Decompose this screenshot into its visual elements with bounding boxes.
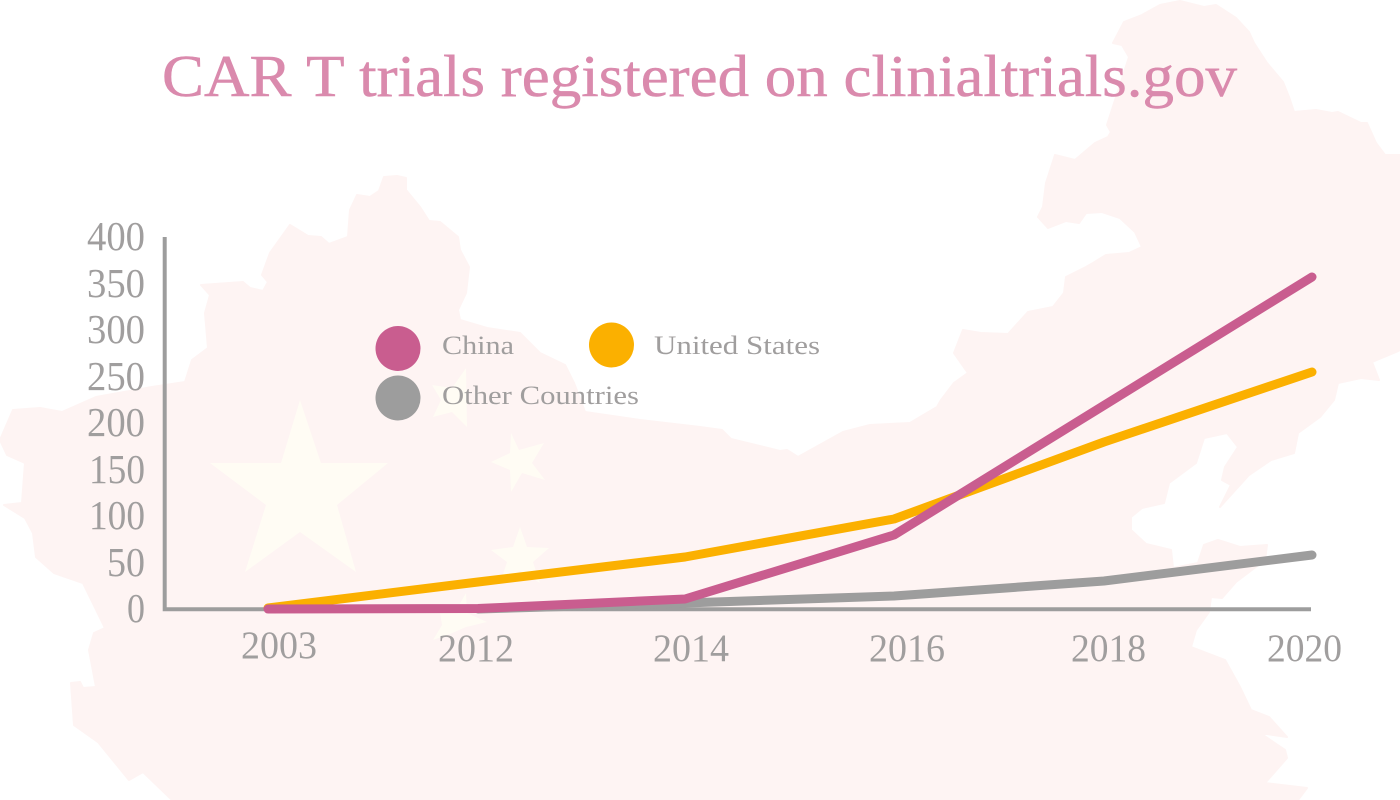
y-axis labels: 400 [87, 213, 145, 259]
series: other countries [478, 555, 1312, 609]
line chart [87, 213, 1342, 670]
y-axis labels: 350 [87, 260, 145, 306]
legend item: United States: United States [654, 331, 820, 360]
axes [165, 237, 1311, 609]
y-axis labels: 250 [87, 353, 145, 399]
title: CAR T trials registered on clinialtrials.gov [162, 43, 1238, 109]
legend item: United States [589, 322, 820, 368]
y-axis labels: 300 [87, 306, 145, 352]
x-axis labels: 2014 [653, 627, 729, 670]
y-axis labels: 0 [127, 585, 145, 631]
legend [376, 322, 820, 420]
y-axis labels [87, 213, 145, 631]
series: China [268, 277, 1312, 609]
x-axis labels: 2003 [241, 624, 317, 667]
y-axis labels: 100 [89, 492, 145, 538]
legend item: Other Countries: Other Countries [442, 381, 639, 410]
legend item: China [376, 326, 515, 371]
x-axis labels: 2020 [1267, 627, 1342, 670]
legend item: Other Countries [376, 376, 639, 420]
y-axis labels: 200 [87, 399, 145, 445]
y-axis labels: 50 [107, 539, 145, 585]
y-axis labels: 150 [89, 446, 145, 492]
legend item: China: China [442, 331, 515, 360]
x-axis labels [241, 624, 1342, 670]
x-axis labels: 2012 [438, 627, 514, 670]
series: United States [268, 372, 1312, 608]
x-axis labels: 2018 [1071, 627, 1146, 670]
x-axis labels: 2016 [869, 627, 945, 670]
